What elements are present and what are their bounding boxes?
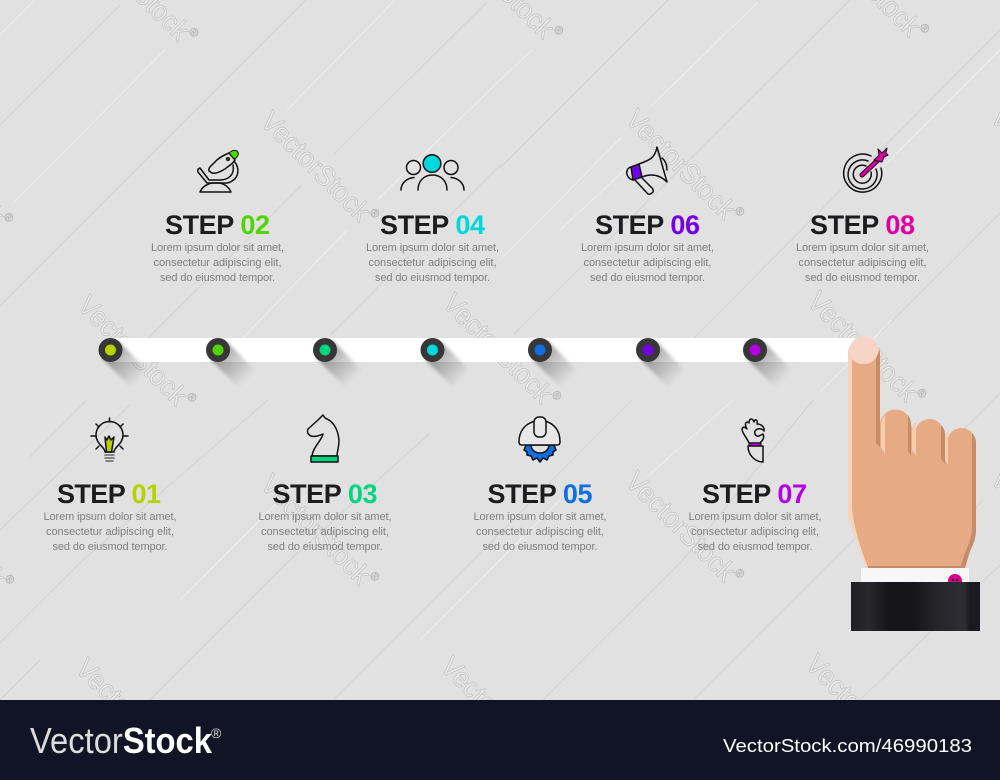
button [948,574,962,588]
step 05 block [474,417,606,553]
watermarks: ® [186,24,202,40]
heading: STEP 04 [380,210,485,240]
step 06 block: sed do eiusmod tempor. [590,272,705,284]
body text: Lorem ipsum dolor sit amet, [151,242,284,254]
step 07 block: sed do eiusmod tempor. [698,541,812,553]
step 04 block [366,155,499,284]
fingernail [849,336,879,364]
body text: Lorem ipsum dolor sit amet, [474,511,606,523]
icon: people [401,155,464,190]
icon: chess knight [307,415,339,462]
watermarks: VectorStock [435,650,562,778]
watermarks: ® [1,209,17,225]
icon: light bulb [91,418,128,461]
watermarks: ® [367,568,383,584]
watermarks: VectorStock [800,648,927,776]
heading: STEP 06 [595,210,700,240]
body text: Lorem ipsum dolor sit amet, [688,511,822,523]
watermarks: ® [732,203,748,219]
body text: Lorem ipsum dolor sit amet, [796,242,929,254]
watermarks: ® [184,389,200,405]
watermarks: VectorStock [70,652,197,780]
hand silhouette [848,338,976,568]
body text: Lorem ipsum dolor sit amet, [366,242,499,254]
watermarks: VectorStock [72,289,199,417]
step 07 block [688,419,822,553]
step 03 block: consectetur adipiscing elit, [261,526,389,538]
body text: Lorem ipsum dolor sit amet, [258,511,392,523]
hand illustration [848,336,980,631]
step 08 block: consectetur adipiscing elit, [798,257,926,269]
footer logo: VectorStock [30,720,213,761]
watermarks: ® [549,387,565,403]
heading: STEP 03 [272,479,378,509]
step 02 block: sed do eiusmod tempor. [160,272,275,284]
watermarks: ® [367,205,383,221]
footer registered mark: ® [211,725,222,741]
icon: target [844,148,888,192]
icon: helmet and gear [519,417,560,462]
step 06 block: consectetur adipiscing elit, [584,257,712,269]
footer url: VectorStock.com/46990183 [723,736,972,756]
heading: STEP 08 [810,210,915,240]
watermarks: VectorStock [255,105,382,233]
step 05 block: consectetur adipiscing elit, [476,526,604,538]
sleeve [851,582,980,631]
watermarks: ® [917,20,933,36]
heading: STEP 07 [702,479,807,509]
body text: Lorem ipsum dolor sit amet, [581,242,714,254]
heading: STEP 01 [57,479,161,509]
watermarks: ® [551,22,567,38]
watermarks: VectorStock [802,285,929,413]
watermarks: ® [547,750,563,766]
watermarks: ® [912,748,928,764]
step 05 block: sed do eiusmod tempor. [482,541,598,553]
heading: STEP 05 [488,479,592,509]
timeline bar [110,338,855,362]
watermarks: ® [914,385,930,401]
icon: megaphone [627,147,667,194]
step 02 block [151,150,284,284]
step 01 block: consectetur adipiscing elit, [46,526,174,538]
footer band [0,700,1000,780]
heading: STEP 02 [165,210,270,240]
step 06 block [581,147,714,284]
step 07 block: consectetur adipiscing elit, [691,526,819,538]
watermarks: ® [732,565,748,581]
finger highlights and shadows [848,341,976,568]
step 03 block [258,415,392,553]
watermarks: VectorStock [255,468,382,596]
step 08 block: sed do eiusmod tempor. [805,272,920,284]
step 02 block: consectetur adipiscing elit, [154,257,282,269]
body text: Lorem ipsum dolor sit amet, [44,511,176,523]
cuff [861,568,969,583]
step 01 block [44,418,176,553]
step 08 block [796,148,929,284]
watermarks: VectorStock [437,287,564,415]
step 04 block: sed do eiusmod tempor. [375,272,490,284]
watermarks: ® [182,752,198,768]
step 01 block: sed do eiusmod tempor. [52,541,168,553]
watermarks: VectorStock [620,465,747,593]
timeline nodes [98,338,793,388]
icon: microscope [198,150,238,192]
step 03 block: sed do eiusmod tempor. [268,541,382,553]
step 04 block: consectetur adipiscing elit, [368,257,496,269]
watermarks: ® [2,571,18,587]
watermarks: VectorStock [620,103,747,231]
icon: OK hand [742,419,764,462]
